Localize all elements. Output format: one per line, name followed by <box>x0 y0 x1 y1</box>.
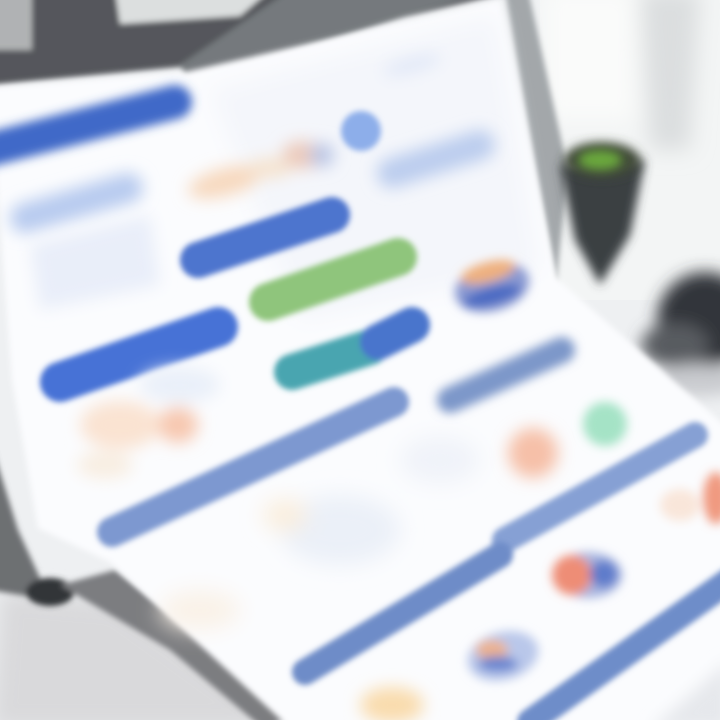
pale chart centre <box>160 436 480 630</box>
orange mini chart <box>185 141 334 205</box>
bottom right corner fade <box>650 660 720 720</box>
icon: multicolour blob <box>449 254 535 320</box>
long bar right <box>505 435 695 540</box>
blue pill left <box>60 327 218 382</box>
pale blue heading left <box>25 188 128 218</box>
green pill <box>268 257 398 302</box>
orange chart left <box>77 367 220 479</box>
slate pill right <box>450 350 562 400</box>
panel tint <box>210 15 540 320</box>
icon: blue circle <box>341 111 381 151</box>
long slate bar <box>112 402 394 532</box>
long bar lower <box>305 555 500 672</box>
orange blob bottom <box>360 687 424 720</box>
pale label top right <box>381 50 443 80</box>
icon: green plant in dark pot <box>560 142 645 285</box>
dark lower-left desk shadow <box>0 440 295 720</box>
icon: green circle <box>583 402 627 446</box>
icon: small pie lower <box>462 624 544 688</box>
monitor and dark top band <box>0 0 520 85</box>
blue pill center <box>198 215 332 260</box>
header bar <box>0 102 175 152</box>
grey sheet edge <box>505 0 568 285</box>
bottom right bar <box>530 580 720 720</box>
icon: orange circle <box>508 428 558 478</box>
pale blue pill top right <box>392 145 480 173</box>
dark object at right edge <box>641 272 720 396</box>
icon: red and blue pie <box>552 552 622 598</box>
teal to blue pill <box>292 325 412 372</box>
pale vertical post <box>545 0 700 150</box>
pale text block left <box>30 215 160 310</box>
icon: orange edge chart <box>660 472 720 524</box>
